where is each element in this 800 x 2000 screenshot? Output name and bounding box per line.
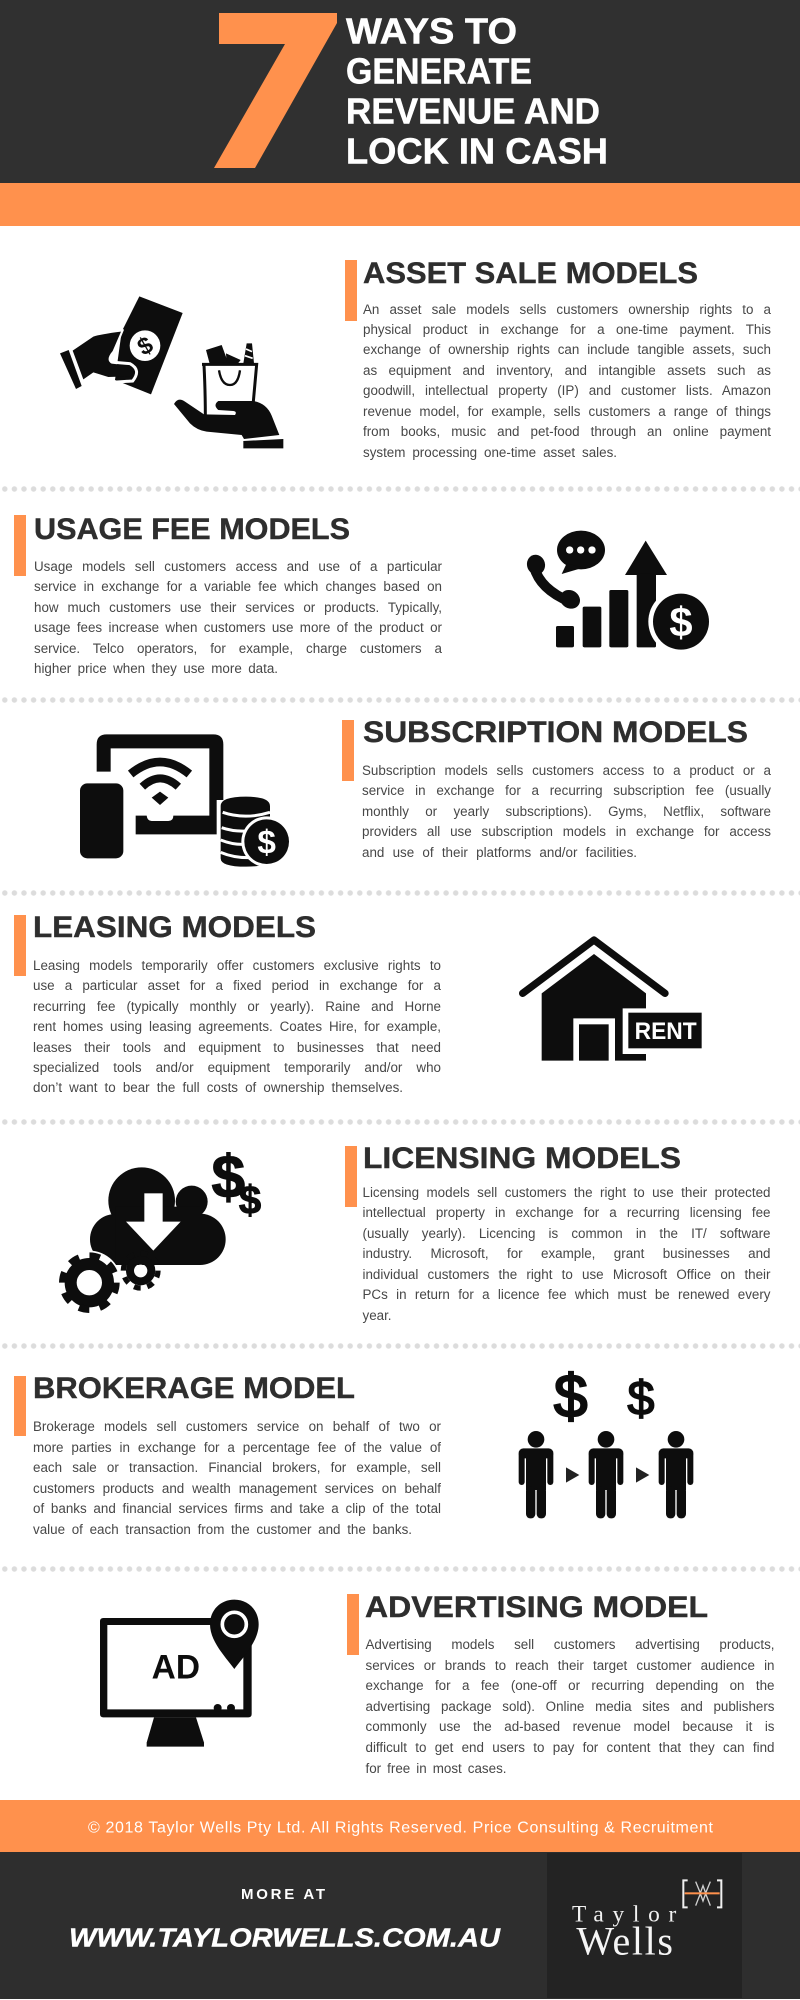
text block: use a particular asset for a fixed period in exchange for a xyxy=(33,978,441,993)
text block: goodwill, intellectual property (IP) and customer lists. Amazon xyxy=(363,383,771,398)
accent bar xyxy=(14,1376,26,1436)
copyright text: © 2018 Taylor Wells Pty Ltd. All Rights Reserved. Price Consulting & Recruitment xyxy=(88,1820,714,1836)
text block xyxy=(33,958,441,1095)
text block xyxy=(363,302,771,460)
panel: asset sale models xyxy=(60,257,771,460)
icon: dollars and three people: $ xyxy=(628,1372,655,1426)
text block: customers products and wealth management services on behalf xyxy=(33,1481,441,1496)
icon: tablet, phone, wifi and coins xyxy=(80,734,289,867)
title: REVENUE AND xyxy=(346,91,600,132)
text block: Leasing models temporarily offer customers exclusive rights to xyxy=(33,958,441,973)
panel: usage fee models xyxy=(14,513,709,676)
heading: ASSET SALE MODELS xyxy=(363,257,698,290)
text block xyxy=(366,1637,774,1776)
text block: providers all use subscription models in exchange for access xyxy=(362,824,771,839)
icon: monitor with ad and location pin xyxy=(100,1600,259,1747)
title xyxy=(214,10,608,172)
heading: ADVERTISING MODEL xyxy=(365,1591,708,1624)
text block: services or brands to reach their target customer audience in xyxy=(366,1658,774,1673)
text block: An asset sale models sells customers ownership rights to a xyxy=(363,302,771,316)
icon: dollars and three people: $ xyxy=(554,1363,587,1430)
text block: exchange of ownership rights can include tangible assets, such xyxy=(363,342,771,357)
text block xyxy=(34,559,442,676)
text block: advertising package sold). Online media sites and publishers xyxy=(366,1699,774,1714)
footer xyxy=(0,1852,800,1999)
text block: commonly use the ad-based revenue model because it is xyxy=(366,1719,774,1734)
panel: advertising model xyxy=(100,1591,774,1776)
text block: individual customers the right to use Microsoft Office on their xyxy=(362,1267,770,1282)
panel: licensing models xyxy=(59,1142,770,1323)
text block: and use of their platforms and/or facilities. xyxy=(362,844,637,860)
text block: recurring fee (typically monthly or yearly). Raine and Horne xyxy=(33,999,441,1014)
text block xyxy=(362,1185,770,1323)
text block xyxy=(33,1419,441,1537)
accent bar xyxy=(14,515,26,576)
website url: WWW.TAYLORWELLS.COM.AU xyxy=(69,1924,501,1952)
text block: higher price when they use more data. xyxy=(34,661,278,676)
title: LOCK IN CASH xyxy=(346,130,608,172)
icon: house for rent: RENT xyxy=(635,1018,697,1045)
icon: phone, bars and dollar: $ xyxy=(669,599,693,646)
icon: tablet, phone, wifi and coins: $ xyxy=(257,825,276,862)
logo: Taylor Wells: Wells xyxy=(576,1919,673,1964)
copyright band xyxy=(0,1800,800,1852)
text block: PCs in return for a licence fee which must be renewed every xyxy=(362,1287,770,1302)
big number seven xyxy=(214,13,337,168)
heading: USAGE FEE MODELS xyxy=(34,513,350,546)
icon: monitor with ad and location pin: AD xyxy=(152,1648,200,1686)
text block: year. xyxy=(362,1308,392,1323)
accent bar xyxy=(14,915,26,976)
text block: Licensing models sell customers the right to use their protected xyxy=(362,1185,770,1200)
text block: service. Telco operators, for example, charge customers a xyxy=(34,640,442,656)
heading: BROKERAGE MODEL xyxy=(33,1372,355,1405)
accent bar xyxy=(345,1146,357,1207)
text block: leases their tools and equipment to businesses that need xyxy=(33,1040,441,1054)
accent bar xyxy=(347,1594,359,1655)
heading: SUBSCRIPTION MODELS xyxy=(363,716,748,749)
accent bar xyxy=(342,720,354,781)
panel: leasing models xyxy=(14,911,702,1095)
accent bar xyxy=(345,260,357,321)
text block: rent homes using leasing agreements. Coates Hire, for example, xyxy=(33,1019,441,1034)
title: WAYS TO xyxy=(346,10,517,52)
logo: Taylor Wells: Taylor xyxy=(572,1901,677,1927)
text block: Subscription models sells customers access to a product or a xyxy=(362,763,771,778)
icon: cloud download, gears and dollars xyxy=(59,1143,262,1313)
icon: hands exchanging money and shopping bag: $ xyxy=(133,331,159,361)
icon: dollars and three people xyxy=(518,1363,694,1518)
text block: how much customers use their services or products. Typically, xyxy=(34,600,442,615)
text block: Brokerage models sell customers service on behalf of two or xyxy=(33,1419,441,1434)
text block: each sale or transaction. Financial brokers, for example, sell xyxy=(33,1460,441,1475)
panel: brokerage model xyxy=(14,1363,694,1537)
text block xyxy=(362,763,771,860)
heading: LICENSING MODELS xyxy=(363,1142,681,1175)
text block: physical product in exchange for a one-time payment. This xyxy=(363,322,771,337)
text block: value of each transaction from the customer and the banks. xyxy=(33,1522,412,1537)
text block: Usage models sell customers access and use of a particular xyxy=(34,559,442,574)
text block: monthly or yearly subscriptions). Gyms, Netflix, software xyxy=(362,804,771,819)
heading: LEASING MODELS xyxy=(33,911,316,944)
icon: house for rent xyxy=(519,936,702,1061)
text block: intellectual property in exchange for a recurring licensing fee xyxy=(362,1205,770,1220)
text block: more parties in exchange for a percentage fee of the value of xyxy=(33,1440,441,1455)
icon: phone, bars and dollar xyxy=(526,530,709,650)
text block: from books, music and pet-food through an online payment xyxy=(363,424,771,439)
text block: exchange for a fee (one-off or recurring depending on the xyxy=(366,1678,774,1693)
more at label xyxy=(69,1886,501,1952)
text block: system processing one-time asset sales. xyxy=(363,445,617,460)
text block: for free in most cases. xyxy=(366,1761,506,1776)
text block: Advertising models sell customers advertising products, xyxy=(366,1637,774,1652)
title: GENERATE xyxy=(346,50,532,92)
text block: revenue model, for example, sells customers a range of things xyxy=(363,404,771,419)
icon: hands exchanging money and shopping bag xyxy=(60,296,284,448)
icon: cloud download, gears and dollars: $ xyxy=(212,1143,245,1210)
text block: (usually yearly). Licencing is common in the IT/ software xyxy=(362,1226,770,1241)
panel: subscription models xyxy=(80,716,771,867)
text block: specialized tools and/or equipment temporarily and/or who xyxy=(33,1060,441,1075)
text block: service in exchange for a recurring subscription fee (usually xyxy=(362,783,771,798)
text block: difficult to get end users to pay for content that they can find xyxy=(366,1740,774,1755)
text block: don’t want to bear the full costs of ownership themselves. xyxy=(33,1080,403,1095)
text block: service in exchange for a variable fee which changes based on xyxy=(34,579,442,594)
more at label: MORE AT xyxy=(241,1886,325,1903)
text block: usage fees increase when customers use more of the product or xyxy=(34,620,442,635)
icon: cloud download, gears and dollars: $ xyxy=(239,1178,261,1222)
logo: Taylor Wells xyxy=(547,1853,742,1998)
text block: industry. Microsoft, for example, grant businesses and xyxy=(362,1246,770,1261)
text block: of banks and financial services firms and take a clip of the total xyxy=(33,1501,441,1516)
orange band xyxy=(0,183,800,226)
text block: as equipment and inventory, and intangible assets such as xyxy=(363,363,771,378)
header banner xyxy=(0,0,800,183)
